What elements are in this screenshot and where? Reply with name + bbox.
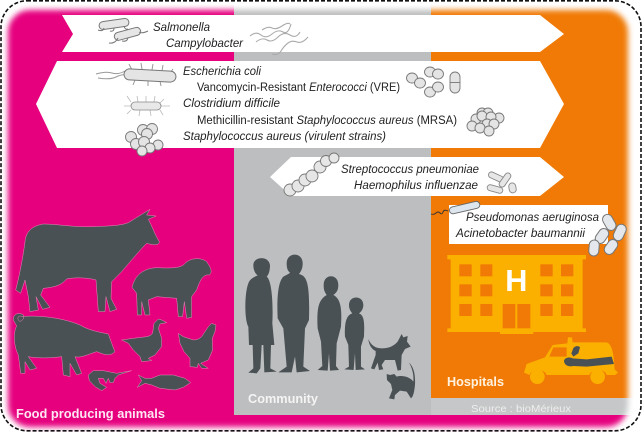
icon: dog [368, 334, 411, 371]
icon: clostridium [124, 96, 170, 116]
text: Salmonella: Salmonella [153, 22, 210, 34]
arrow: middle band [36, 61, 564, 148]
icon: sheep [132, 259, 211, 318]
icon: mrsa cluster [467, 108, 504, 136]
icon: campylobacter spirals [250, 23, 308, 55]
icon: H letter: H [505, 264, 527, 298]
icon: streptococcus chain [284, 153, 339, 196]
icon: child [317, 276, 341, 371]
text: Campylobacter: Campylobacter [166, 38, 244, 50]
text: MRSA: Methicillin-resistant Staphylococcus aureus (MRSA) [197, 115, 457, 127]
food producing animals silhouettes [13, 209, 216, 391]
icon: cat [387, 363, 415, 399]
source note: Source : bioMérieux [471, 403, 572, 415]
arrow: top band [62, 15, 564, 52]
icon: acinetobacter [588, 213, 628, 256]
hospital group [447, 255, 618, 384]
icon: shrimp [88, 371, 132, 391]
text: Staphylococcus aureus virulent: Staphylococcus aureus (virulent strains) [183, 131, 386, 143]
icon: ambulance [524, 337, 618, 384]
bottom pink band [234, 415, 643, 432]
heading: Hospitals: Hospitals [447, 374, 504, 389]
hospital box [449, 205, 608, 244]
panel: community [234, 0, 431, 415]
text: Acinetobacter baumannii: Acinetobacter baumannii [455, 228, 585, 240]
text: Streptococcus pneumoniae: Streptococcus pneumoniae [341, 164, 479, 176]
text: Haemophilus influenzae: Haemophilus influenzae [354, 180, 478, 192]
panel: hospitals [431, 0, 643, 398]
icon: enterococci [406, 67, 460, 97]
panel: food producing animals [0, 0, 234, 432]
source band [431, 398, 643, 416]
icon: duck [122, 319, 167, 362]
icon: hospital building [447, 255, 586, 334]
icon: pig [13, 313, 115, 377]
icon: adult woman [245, 258, 277, 373]
icon: e. coli [96, 63, 176, 86]
heading: Food producing animals: Food producing animals [16, 406, 165, 421]
text: Escherichia coli: Escherichia coli [183, 66, 261, 78]
icon: cow [16, 209, 159, 312]
icon: haemophilus [486, 171, 517, 194]
icon: pseudomonas [431, 201, 481, 214]
arrow: community band [270, 157, 564, 196]
icon: staphylococcus cluster left [126, 124, 163, 156]
icon: salmonella bacteria [98, 18, 148, 43]
heading: Community: Community [248, 391, 319, 406]
icon: hen [178, 323, 216, 368]
icon: patient [564, 346, 614, 367]
text: Pseudomonas aeruginosa: Pseudomonas aeruginosa [466, 212, 599, 224]
icon: adult man [277, 255, 310, 372]
community silhouettes [245, 255, 415, 399]
text: Clostridium difficile: Clostridium difficile [183, 98, 280, 110]
icon: small child [344, 297, 365, 370]
text: VRE: Vancomycin-Resistant Enterococci (VRE) [197, 82, 400, 94]
icon: fish [137, 375, 191, 390]
